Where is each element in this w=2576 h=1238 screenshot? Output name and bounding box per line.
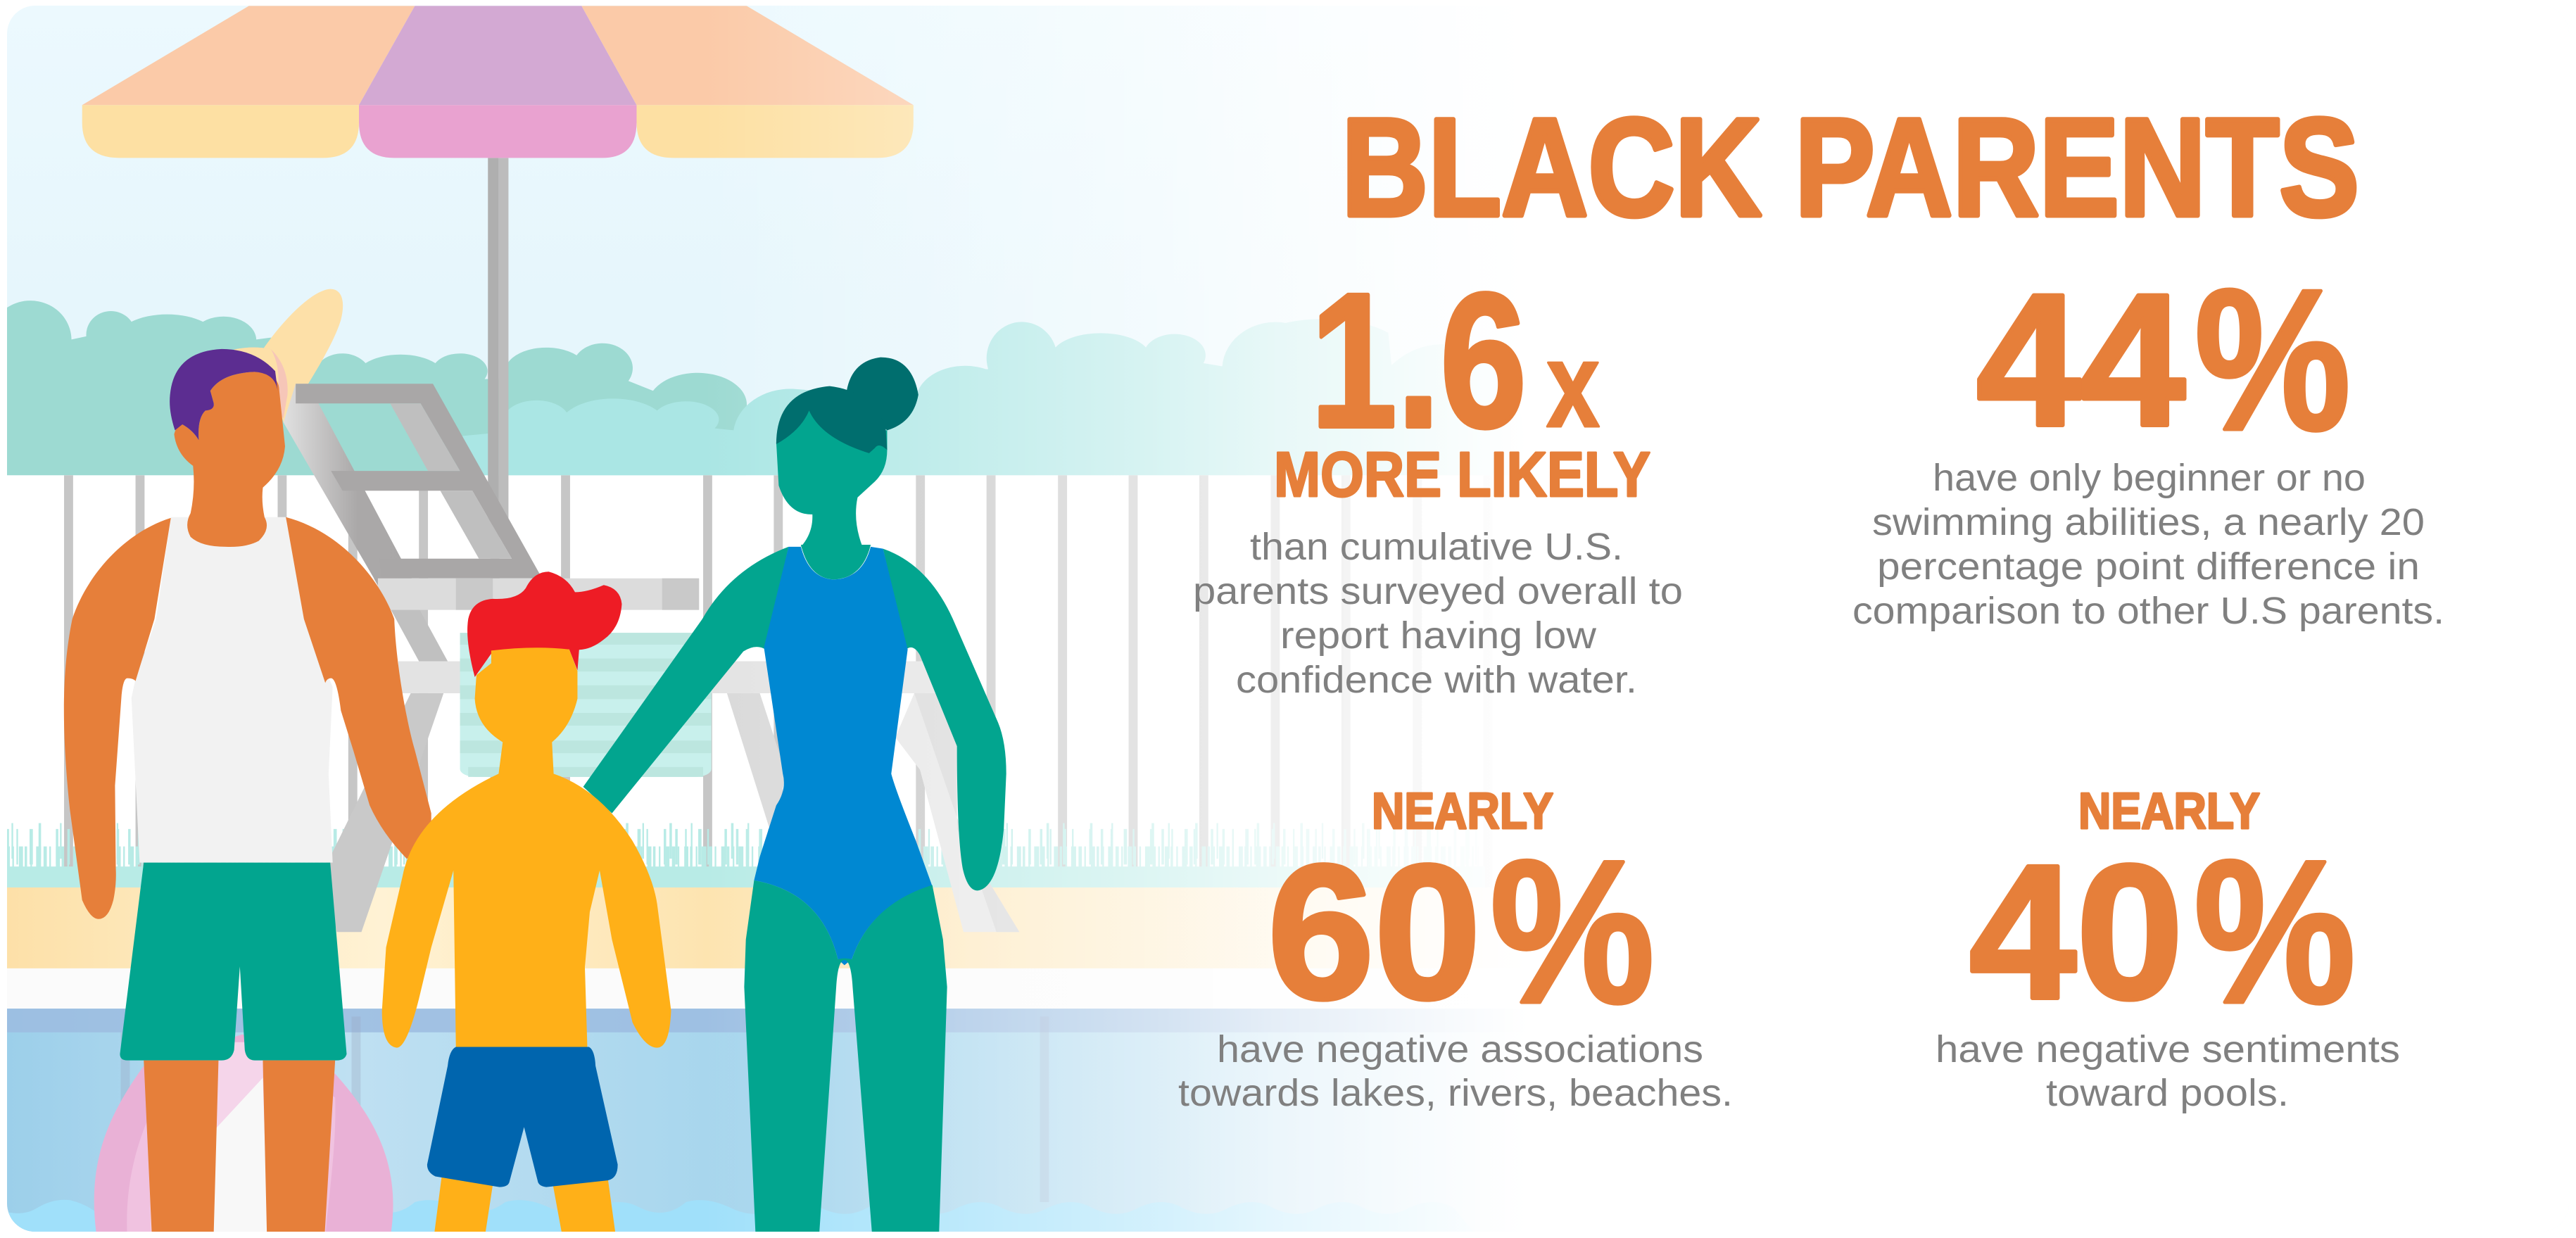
water waves	[8, 1200, 1227, 1232]
figure: father	[64, 349, 431, 1238]
figure: son	[382, 571, 671, 1238]
stat description: toward pools.	[2046, 1072, 2289, 1114]
stat description: comparison to other U.S parents.	[1852, 590, 2444, 632]
stat description	[1852, 457, 2444, 632]
beach ball	[94, 1035, 393, 1238]
father head and neck	[174, 372, 285, 547]
panel: pool scene background	[7, 6, 1450, 1232]
stat: nearly 40%	[1936, 783, 2400, 1114]
lounger upper seat bar	[378, 579, 699, 610]
father left arm	[64, 518, 171, 919]
title: BLACK PARENTS	[1341, 89, 2359, 245]
mother swimsuit	[754, 547, 933, 965]
stat label more likely: MORE LIKELY	[1274, 440, 1650, 510]
stat label nearly: NEARLY	[1372, 783, 1553, 840]
stat percent sign: %	[2194, 818, 2356, 1046]
lounger lower seat bar	[398, 662, 957, 693]
stat description: confidence with water.	[1236, 659, 1637, 701]
umbrella	[82, 6, 914, 158]
mother head and neck	[776, 410, 887, 547]
stat description: swimming abilities, a nearly 20	[1872, 501, 2425, 543]
stat: 44%	[1852, 247, 2444, 632]
pool coping band	[7, 1009, 1274, 1032]
stat description: have negative sentiments	[1936, 1028, 2400, 1070]
lounger middle leg	[727, 693, 784, 828]
stat description	[1193, 526, 1683, 701]
pool ledge	[7, 968, 1185, 1009]
father hair	[170, 349, 277, 440]
lounger rear leg	[896, 694, 997, 932]
father shorts	[120, 863, 347, 1061]
stat: nearly 60%	[1178, 783, 1733, 1114]
mother legs	[744, 880, 947, 1238]
sky	[7, 6, 1246, 405]
stat multiplier x: x	[1546, 317, 1600, 453]
fence reflections	[121, 1016, 1049, 1202]
stat description: towards lakes, rivers, beaches.	[1178, 1072, 1733, 1114]
stat label nearly: NEARLY	[2078, 783, 2260, 840]
stat description: percentage point difference in	[1877, 545, 2420, 588]
son body and head	[382, 648, 671, 1048]
stat figure 1.6: 1.6	[1311, 253, 1527, 467]
stat description: have only beginner or no	[1933, 457, 2366, 499]
stat description: than cumulative U.S.	[1250, 526, 1623, 568]
fence boards	[7, 475, 1246, 867]
stat: 1.6x more likely	[1193, 253, 1683, 701]
mother hair	[776, 386, 887, 453]
lounger back frame	[284, 384, 419, 592]
front hedge	[462, 320, 1406, 476]
mother hair bun	[846, 358, 918, 430]
fade to white	[783, 6, 1527, 1232]
father legs	[144, 1061, 335, 1238]
son hair	[467, 571, 621, 677]
mother raised arm	[583, 547, 788, 813]
stat figure 60: 60	[1268, 825, 1481, 1039]
stat figure 44: 44	[1976, 254, 2187, 465]
mother hanging arm	[883, 549, 1006, 890]
stat description	[1936, 1028, 2400, 1114]
towel	[460, 633, 712, 777]
pool water	[7, 1009, 1360, 1232]
stat figure 40: 40	[1969, 825, 2183, 1039]
mother chest	[801, 545, 871, 579]
lounger front leg	[324, 693, 443, 932]
son legs	[434, 1175, 616, 1238]
sand	[7, 887, 1387, 968]
stat description: have negative associations	[1217, 1028, 1703, 1070]
son shorts	[427, 1047, 618, 1187]
stat description: report having low	[1280, 614, 1597, 657]
grass	[6, 841, 1485, 888]
figure: mother	[583, 358, 1006, 1238]
stat description	[1178, 1028, 1733, 1114]
stat description: parents surveyed overall to	[1193, 570, 1683, 612]
father right arm	[286, 517, 431, 859]
surfboard	[234, 289, 343, 422]
father shirt	[132, 517, 333, 863]
umbrella pole	[488, 158, 508, 525]
stat percent sign: %	[2195, 247, 2351, 472]
back hedge	[6, 301, 747, 475]
stat percent sign: %	[1490, 818, 1655, 1046]
sun lounger	[284, 384, 1019, 932]
